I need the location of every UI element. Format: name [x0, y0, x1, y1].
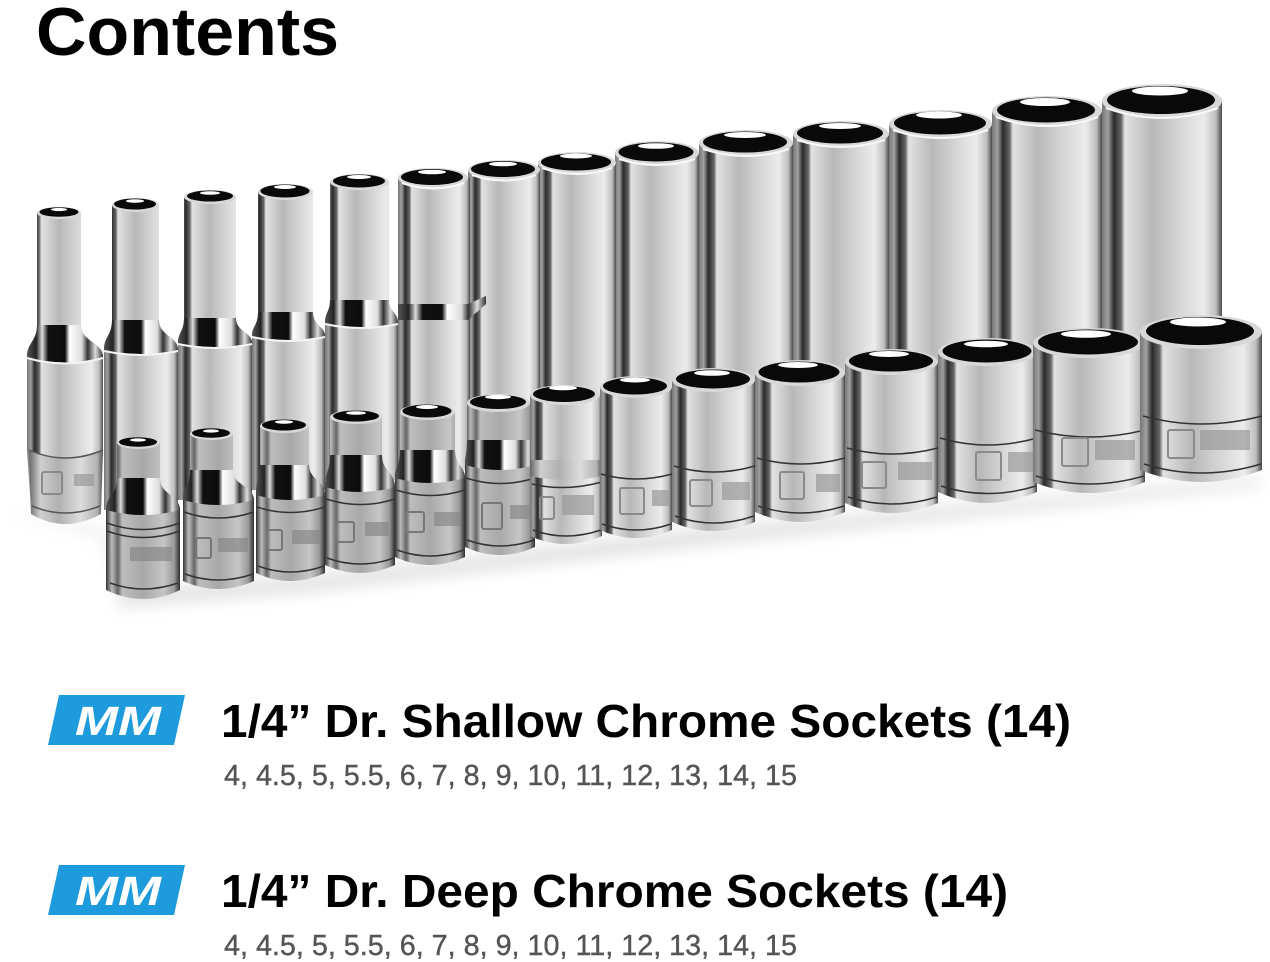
shallow socket 7 — [530, 385, 602, 544]
shallow socket 1 — [106, 437, 180, 599]
deep socket 3 — [178, 190, 252, 500]
shallow socket 5 — [395, 404, 465, 565]
shallow socket 11 — [845, 349, 938, 513]
MM badge — [48, 865, 185, 915]
MM badge: MM — [75, 698, 162, 744]
deep socket 10 — [699, 130, 793, 430]
shallow socket 2 — [183, 428, 254, 589]
shallow socket 10 — [755, 360, 845, 522]
deep socket 1 — [27, 207, 103, 524]
deep socket 7 — [468, 160, 540, 450]
deep socket 5 — [325, 174, 398, 480]
deep socket 6 — [398, 168, 486, 470]
shallow socket 8 — [600, 376, 672, 538]
deep socket 9 — [615, 141, 699, 430]
MM badge: MM — [75, 868, 162, 914]
deep socket 11 — [793, 121, 889, 420]
heading: 1/4” Dr. Deep Chrome Sockets (14) — [221, 865, 1008, 917]
deep socket 4 — [252, 184, 325, 490]
deep socket 8 — [538, 152, 616, 440]
shallow socket 12 — [938, 338, 1037, 503]
heading: 1/4” Dr. Shallow Chrome Sockets (14) — [221, 695, 1071, 747]
row 1: shallow sockets — [48, 695, 1071, 792]
size list: 4, 4.5, 5, 5.5, 6, 7, 8, 9, 10, 11, 12, 13, 14, 15 — [224, 930, 797, 962]
deep socket 12 — [889, 110, 992, 410]
shallow socket 4 — [325, 410, 395, 573]
deep socket 2 — [104, 198, 178, 510]
shallow socket 13 — [1033, 328, 1145, 493]
shallow socket 14 — [1140, 315, 1262, 482]
MM badge — [48, 695, 185, 745]
shallow socket 6 — [465, 394, 535, 555]
size list: 4, 4.5, 5, 5.5, 6, 7, 8, 9, 10, 11, 12, 13, 14, 15 — [224, 760, 797, 792]
shallow socket row — [106, 315, 1262, 599]
deep socket 14 back — [1102, 84, 1222, 400]
deep socket row — [27, 84, 1222, 524]
shallow socket 3 — [256, 419, 325, 581]
deep socket 13 — [992, 96, 1102, 400]
ground shadow — [5, 478, 1260, 606]
shallow socket 9 — [672, 368, 755, 531]
row 2: deep sockets — [48, 865, 1008, 962]
